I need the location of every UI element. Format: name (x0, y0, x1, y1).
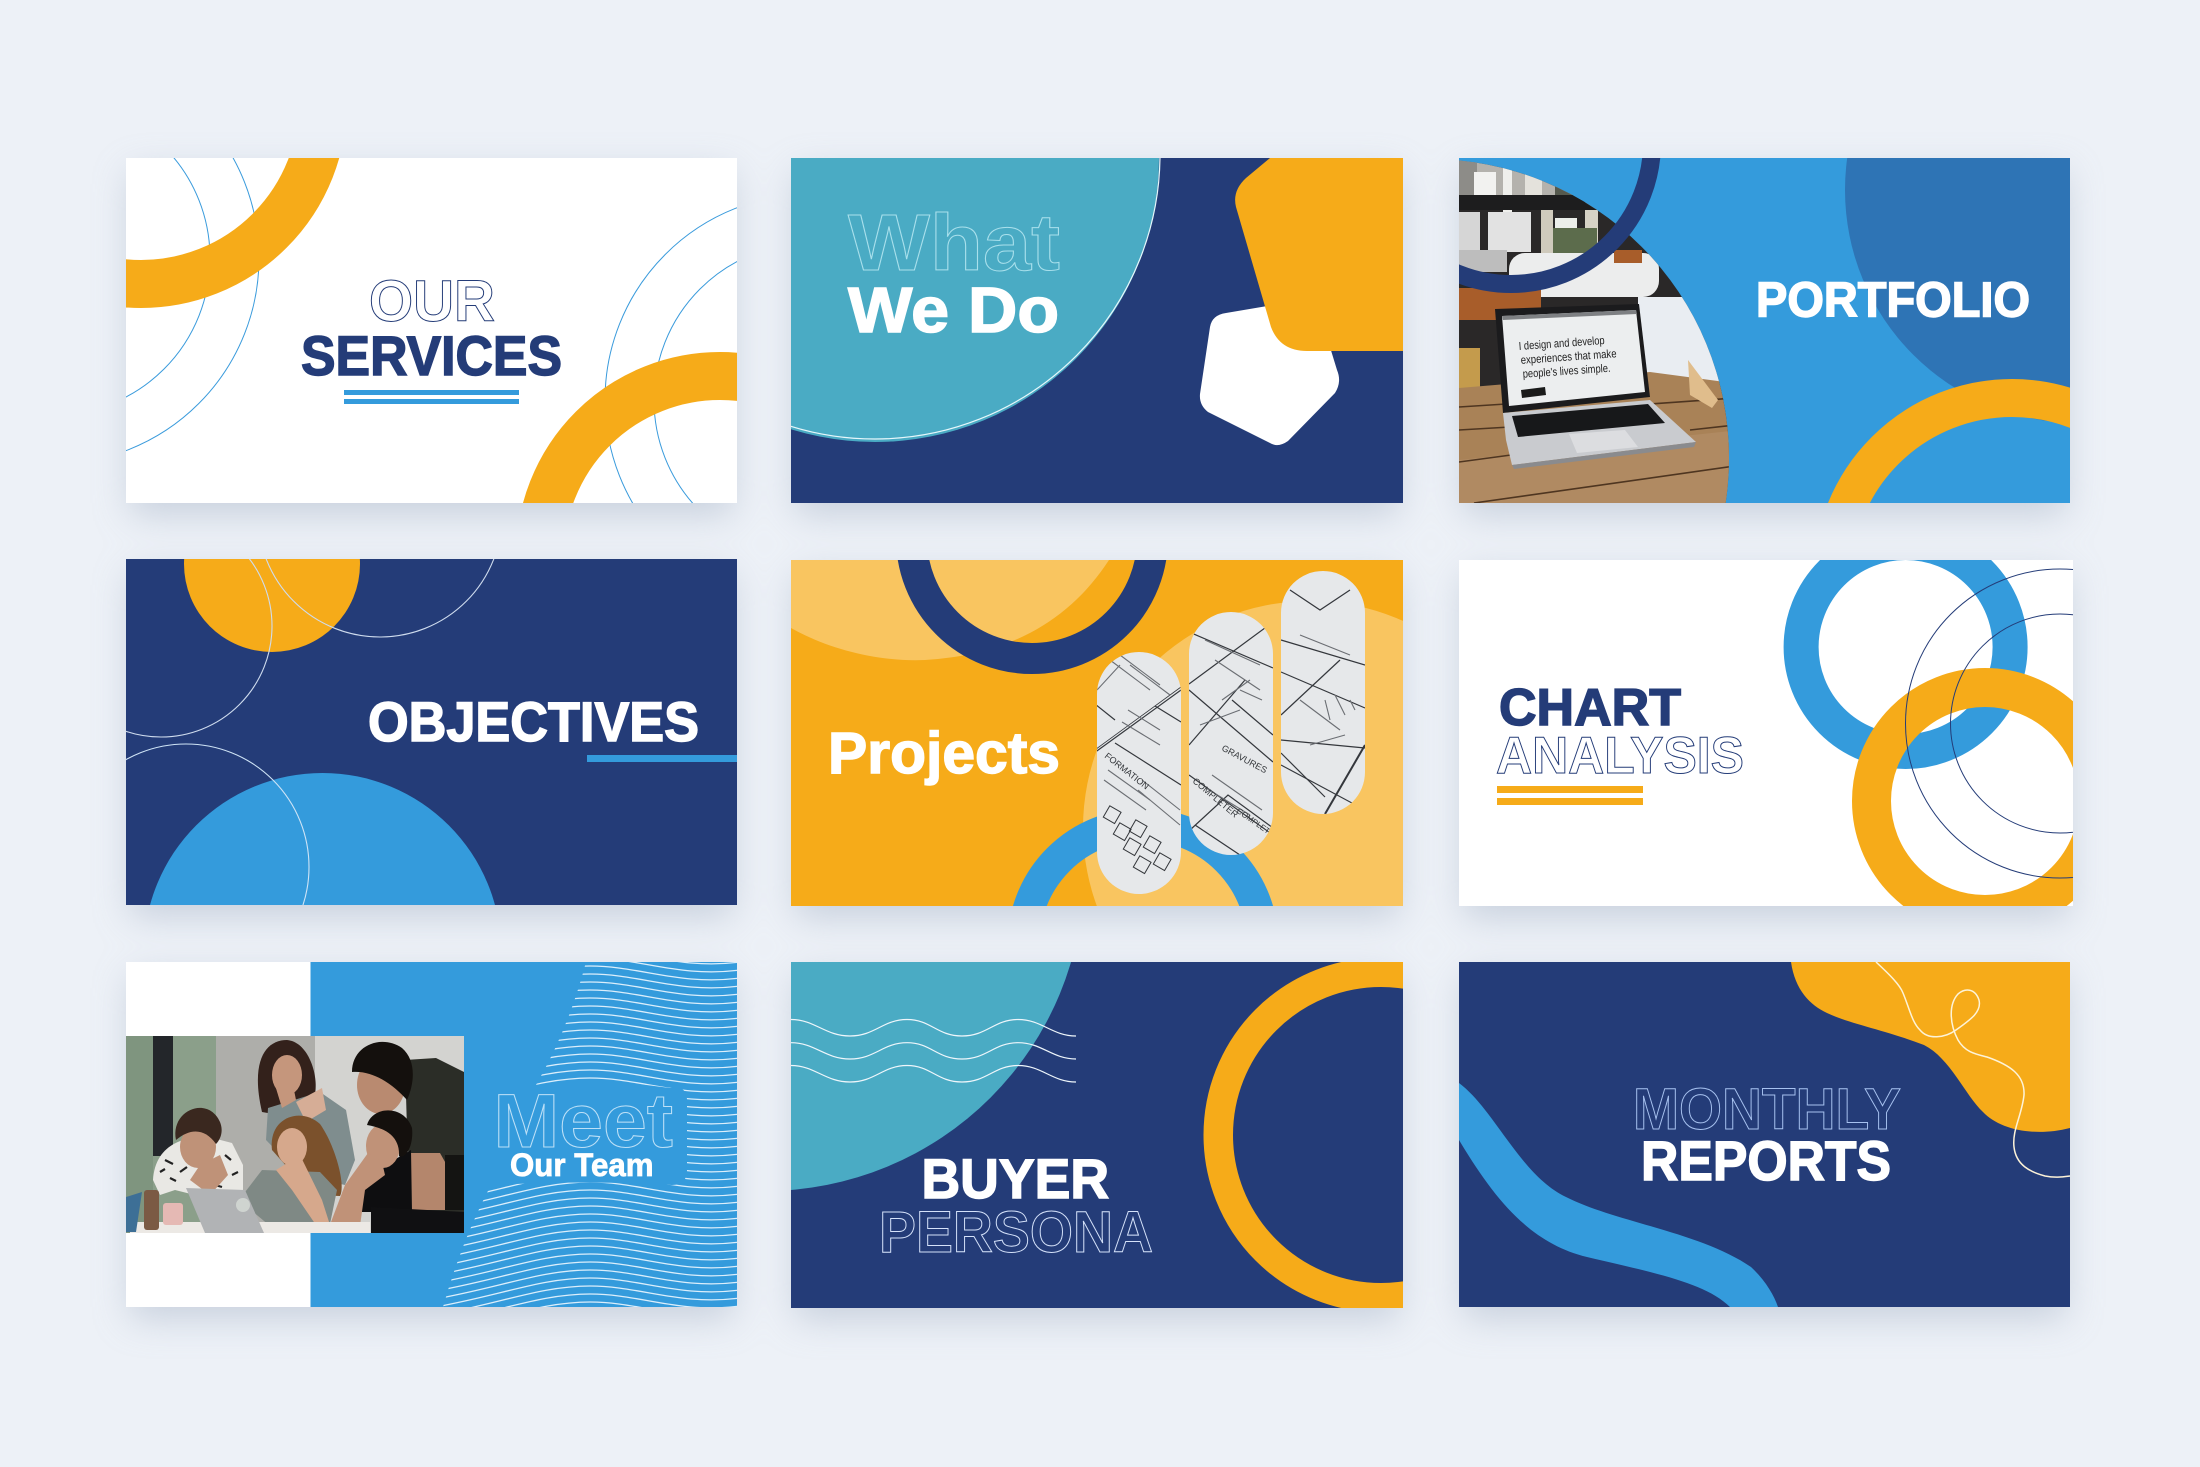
heading: portfolio: PORTFOLIO (1756, 274, 2030, 328)
panel: projects (791, 560, 1403, 906)
heading: what: What (848, 198, 1060, 287)
panel: what we do (791, 158, 1403, 503)
orange pentagon (1235, 158, 1403, 351)
orange circle (184, 476, 360, 652)
heading: our team: Our Team (510, 1147, 654, 1183)
blue ribbon (1459, 1083, 1778, 1307)
panel: monthly reports (1459, 962, 2070, 1307)
panel: our services (126, 158, 737, 503)
orange arc top left (0, 0, 323, 284)
orange ring (1832, 398, 2192, 757)
heading: projects: Projects (828, 721, 1060, 786)
teal circle (591, 0, 1159, 442)
wave line field (443, 962, 737, 1307)
blue ring (1024, 824, 1262, 1064)
orange ring (1218, 972, 1544, 1298)
orange blob (1791, 962, 2070, 1132)
navy ring (912, 418, 1152, 658)
double underline (344, 390, 519, 404)
photo pills: wireframe sketches: FORMATION (1103, 751, 1151, 791)
photo: laptop on table: people's lives simple. (1522, 363, 1611, 381)
photo pills: wireframe sketches: COMPLETER (1235, 806, 1281, 842)
light shape top left (791, 560, 1109, 660)
blue circle (144, 773, 501, 1130)
heading: monthly: MONTHLY (1633, 1077, 1901, 1142)
white left block (126, 962, 310, 1307)
light circle right (1083, 601, 1537, 1055)
heading: objectives: OBJECTIVES (368, 690, 699, 753)
orange ring (1872, 688, 2098, 914)
wavy lines (791, 1020, 1076, 1082)
heading: our: OUR (369, 269, 495, 334)
dark blue circle (1845, 0, 2200, 423)
panel: portfolio (1459, 158, 2070, 503)
photo: laptop on table (1459, 158, 1740, 503)
orange arc bottom right (540, 376, 900, 736)
heading: we do: We Do (848, 274, 1059, 346)
blue ring (1801, 542, 2010, 752)
panel: chart analysis (1459, 560, 2073, 906)
navy ring (1370, 2, 1652, 284)
photo: laptop on table: I design and develop (1518, 335, 1605, 353)
teal circle (446, 553, 1084, 1191)
underline bar (587, 755, 737, 762)
heading: reports: REPORTS (1641, 1129, 1891, 1192)
curly line (1876, 962, 2070, 1177)
heading: services: SERVICES (301, 324, 562, 387)
heading: meet: Meet (494, 1079, 673, 1164)
double underline (1497, 786, 1643, 805)
photo: team around a laptop (126, 1036, 464, 1233)
panel: buyer persona (791, 962, 1403, 1308)
heading: buyer: BUYER (922, 1147, 1109, 1210)
photo pills: wireframe sketches (1090, 565, 1370, 900)
white pentagon (1200, 298, 1339, 445)
heading: persona: PERSONA (879, 1200, 1153, 1265)
heading: chart: CHART (1499, 679, 1681, 737)
photo: laptop on table: experiences that make (1520, 348, 1617, 367)
heading: analysis: ANALYSIS (1496, 727, 1744, 785)
panel: meet our team (126, 962, 737, 1307)
photo pills: wireframe sketches: GRAVURES (1220, 743, 1269, 775)
panel: objectives (126, 559, 737, 905)
photo pills: wireframe sketches: COMPLETER (1191, 776, 1240, 820)
